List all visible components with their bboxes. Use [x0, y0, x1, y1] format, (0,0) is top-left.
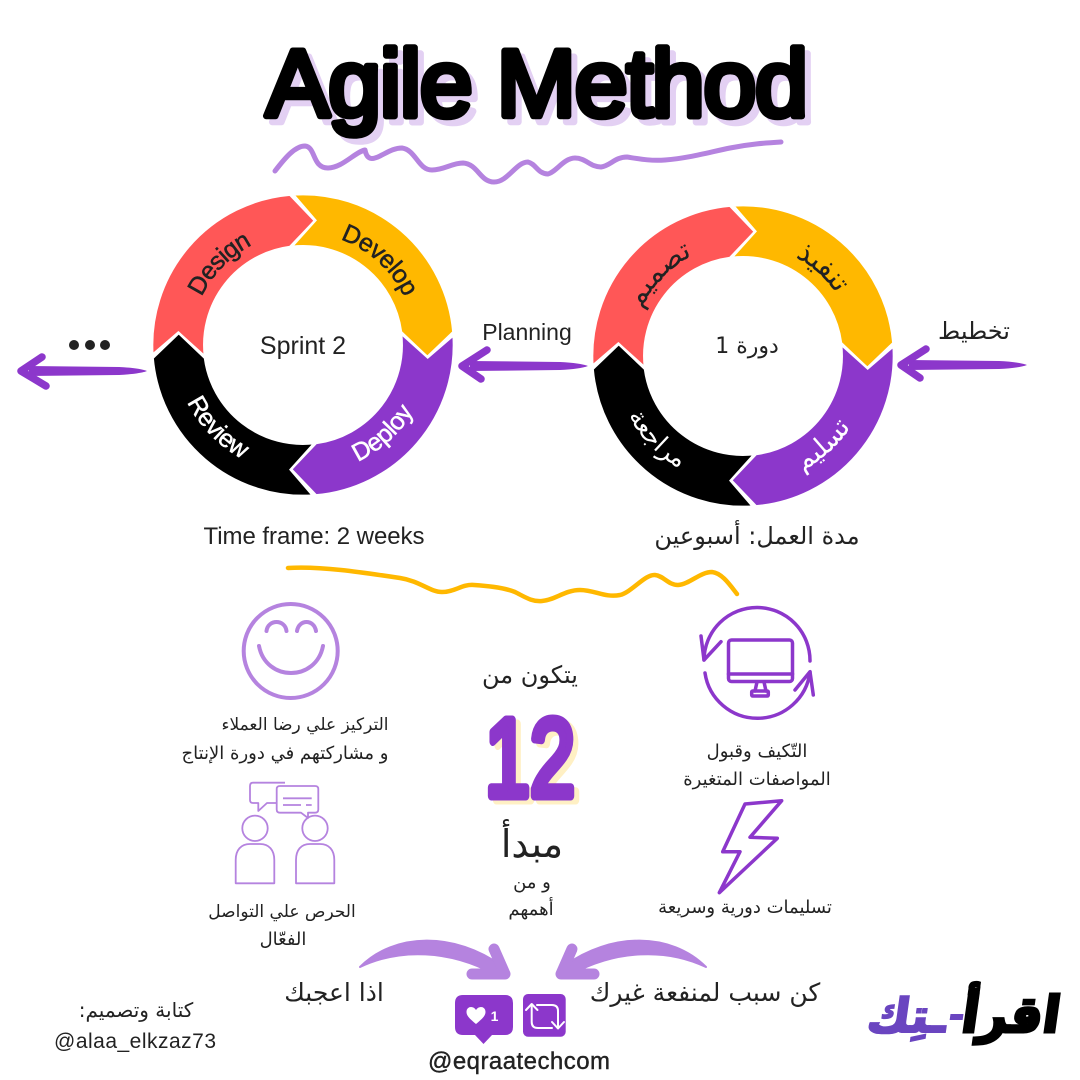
arrow: curved left	[360, 941, 505, 974]
text: most important: و من	[513, 872, 551, 893]
heading: Planning: Planning	[482, 319, 572, 345]
label: تسليم: تسليم	[804, 420, 848, 476]
text: effective communication	[208, 902, 356, 950]
segment: deploy	[731, 344, 894, 506]
text: share: كن سبب لمنفعة غيرك	[590, 978, 820, 1007]
text: author credit	[54, 998, 216, 1053]
arrow: curved right	[561, 941, 706, 974]
segment: review	[593, 344, 755, 507]
heading: تخطيط: تخطيط	[938, 317, 1010, 345]
segment: Design	[152, 195, 315, 357]
number: 12: 12	[490, 701, 580, 824]
icon: like notification: 1	[491, 1008, 499, 1024]
text: if you liked it: اذا اعجبك	[284, 978, 384, 1007]
label: Develop: Develop	[342, 224, 414, 295]
label: تنفيذ: تنفيذ	[796, 244, 847, 290]
label: تصميم: تصميم	[638, 244, 689, 310]
icon: smiley	[244, 604, 338, 698]
text: consists of: يتكون من	[482, 661, 578, 689]
center label: Sprint 2: Sprint 2	[260, 332, 346, 360]
cycle: دورة 1	[593, 206, 893, 506]
text: adapting to change: المواصفات المتغيرة	[683, 769, 831, 790]
cycle: Sprint 2	[153, 195, 453, 495]
logo	[864, 982, 1065, 1045]
title: Agile Method	[272, 37, 814, 143]
segment: Develop	[291, 194, 453, 357]
text: customer satisfaction: و مشاركتهم في دورة الإنتاج	[182, 743, 388, 764]
text: customer satisfaction: التركيز علي رضا العملاء	[221, 715, 389, 735]
text: most important	[508, 872, 554, 920]
segment: develop	[731, 205, 893, 368]
number: 12: 12	[485, 697, 575, 820]
title underline squiggle	[275, 142, 781, 182]
logo: اقرأ	[958, 982, 1065, 1045]
yellow squiggle divider	[288, 568, 737, 601]
icon: repost	[523, 994, 566, 1037]
text: author credit: @alaa_elkzaz73	[54, 1030, 216, 1053]
text: most important: أهمهم	[508, 897, 554, 920]
text: time frame english: Time frame: 2 weeks	[204, 523, 424, 550]
title: Agile Method	[266, 31, 808, 137]
segment: Review	[153, 333, 315, 496]
icon: lightning bolt	[719, 801, 782, 893]
text: effective communication: الحرص علي التواصل	[208, 902, 356, 922]
ellipsis dots	[69, 340, 110, 350]
text: principles: مبدأ	[501, 819, 563, 866]
text: customer satisfaction	[182, 715, 389, 764]
label: Design: Design	[187, 235, 251, 296]
arrow: into cycle 1	[901, 349, 1027, 378]
text: time frame arabic: مدة العمل: أسبوعين	[654, 520, 860, 550]
center label: دورة 1: دورة 1	[715, 334, 779, 359]
label: Deploy: Deploy	[351, 404, 414, 462]
arrow: next sprint	[21, 357, 147, 386]
label: مراجعة: مراجعة	[631, 412, 681, 467]
text: fast deliveries: تسليمات دورية وسريعة	[658, 897, 832, 918]
logo: ـتِك	[864, 989, 951, 1044]
icon: people talking	[236, 783, 334, 883]
text: adapting to change	[683, 741, 831, 790]
segment: design	[592, 206, 755, 368]
arrow: cycle 1 to sprint 2	[462, 350, 588, 379]
label: Review: Review	[188, 395, 250, 458]
text: handle eqraatechcom: @eqraatechcom	[428, 1048, 610, 1075]
text: effective communication: الفعّال	[260, 929, 306, 950]
icon: like notification	[455, 995, 513, 1044]
text: adapting to change: التّكيف وقبول	[707, 741, 807, 762]
icon: monitor with cycle arrows	[701, 607, 813, 718]
segment: Deploy	[291, 333, 454, 495]
text: author credit: كتابة وتصميم:	[79, 998, 194, 1022]
